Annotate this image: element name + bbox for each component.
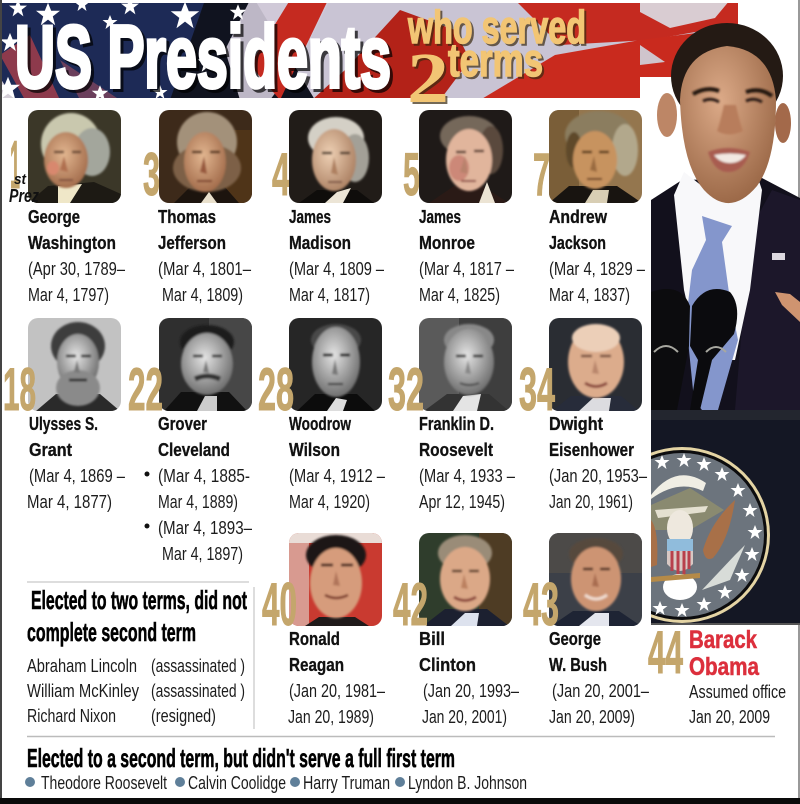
microphones [651,289,737,410]
subtitle: who served 2 terms [407,1,588,120]
number 44: 44 [648,619,683,686]
number 5: 5 [403,141,420,208]
title: US Presidents [18,10,394,109]
panel: James Monroe [403,110,514,305]
tie [686,216,738,410]
name and dates: (Mar 4, 1809 – [289,259,384,279]
name and dates: Mar 4, 1889) [158,492,238,512]
list with bullets: Theodore Roosevelt [41,773,167,793]
heading: complete second term [27,617,196,647]
name and dates: Apr 12, 1945) [419,492,505,512]
suit [651,178,800,410]
panel: Franklin D. Roosevelt [388,318,515,512]
name and dates: Thomas [158,207,216,227]
name and dates: (Jan 20, 2001– [552,681,649,701]
list: William McKinley [27,681,139,701]
name and dates: James [289,207,331,227]
panel: Andrew Jackson [533,110,645,305]
name and dates: Jan 20, 2001) [422,707,507,727]
lapel pin [772,253,785,260]
head [657,23,791,203]
portrait [28,110,121,203]
name: Obama [689,653,760,681]
number 40: 40 [262,571,297,638]
name and dates [288,629,385,727]
name and dates [419,629,519,727]
panel: Ronald Reagan [262,533,385,727]
panel: Ulysses S. Grant: 18 [3,356,36,423]
name and dates: George [549,629,601,649]
heading: Elected to two terms, did not [31,585,247,615]
list: Richard Nixon [27,706,116,726]
list with bullets: Calvin Coolidge [188,773,286,793]
name and dates: Jackson [549,233,606,253]
name and dates: (Mar 4, 1933 – [419,466,515,486]
name and dates: (Mar 4, 1885- [158,466,250,486]
name and dates: (Mar 4, 1817 – [419,259,514,279]
title [15,7,394,109]
name and dates: (Mar 4, 1801– [158,259,251,279]
name and dates: Mar 4, 1825) [419,285,500,305]
heading: Elected to a second term, but didn't serve a full first term [27,743,455,773]
name and dates: Eisenhower [549,440,634,460]
portrait [419,110,512,203]
name and dates: Jan 20, 1961) [549,492,633,512]
panel: Bill Clinton [393,533,519,727]
portrait [289,533,382,626]
name and dates: Mar 4, 1877) [27,492,112,512]
number 43: 43 [523,571,559,638]
list: (assassinated ) [151,681,245,701]
name and dates: (Jan 20, 1981– [289,681,385,701]
portrait [159,110,252,203]
name and dates: Madison [289,233,351,253]
name: Barack [689,626,757,654]
hand [775,292,800,322]
number 3: 3 [143,141,160,208]
name and dates: (Jan 20, 1953– [549,466,647,486]
right page border [798,0,800,804]
name and dates: Woodrow [289,414,352,434]
name and dates: W. Bush [549,655,607,675]
name and dates: Bill [419,629,445,649]
portrait [419,318,512,411]
list: Abraham Lincoln [27,656,137,676]
list with bullets [25,773,527,793]
portrait [549,110,642,203]
name and dates [27,414,125,512]
name and dates [28,207,125,305]
panel: Woodrow Wilson [258,318,385,512]
panel: elected to two terms [27,582,254,729]
list [27,656,245,726]
name and dates: Mar 4, 1797) [28,285,109,305]
name and dates: Monroe [419,233,475,253]
banner: american flag [2,3,738,98]
name and dates: George [28,207,80,227]
panel: James Madison [272,110,384,305]
name and dates [549,207,645,305]
name and dates: Mar 4, 1920) [289,492,370,512]
list: (resigned) [151,706,216,726]
name and dates [549,629,649,727]
number 7: 7 [533,141,550,208]
name and dates: Cleveland [158,440,230,460]
panel: George W. Bush [523,533,649,727]
name and dates [549,414,647,512]
title: US Presidents [15,7,391,106]
panel: Thomas Jefferson [143,110,252,305]
shirt [674,172,762,360]
name and dates: Jefferson [158,233,226,253]
number 1st prez: st [14,171,27,188]
name and dates [158,207,251,305]
name and dates: (Mar 4, 1869 – [29,466,125,486]
number 4: 4 [272,141,290,208]
office dates [689,682,786,727]
name and dates: Washington [28,233,116,253]
portrait [549,318,642,411]
seal [651,447,770,623]
portrait [159,318,252,411]
name and dates: Clinton [419,655,476,675]
subtitle: who served 2 terms: 2 [407,38,449,118]
number 34: 34 [519,356,555,423]
panel: George Washington [9,110,125,305]
name and dates [144,414,252,564]
bottom page border [0,798,800,804]
number 28: 28 [258,356,294,423]
name and dates: Jan 20, 1989) [288,707,374,727]
photo: podium with presidential seal [651,410,800,625]
name and dates: Mar 4, 1817) [289,285,370,305]
list with bullets: Lyndon B. Johnson [408,773,527,793]
portrait [419,533,512,626]
name and dates [419,414,515,512]
name and dates [289,414,385,512]
heading [27,585,247,647]
subtitle: who served 2 terms: terms [448,34,543,86]
subtitle: who served 2 terms: 2 [409,40,451,120]
name and dates: Mar 4, 1837) [549,285,630,305]
name and dates: (Mar 4, 1912 – [289,466,385,486]
list: (assassinated ) [151,656,245,676]
subtitle: who served 2 terms: who served [407,1,586,53]
name and dates: (Jan 20, 1993– [423,681,519,701]
portrait [289,318,382,411]
name and dates: Wilson [289,440,340,460]
list with bullets: Harry Truman [303,773,390,793]
name and dates [419,207,514,305]
subtitle: who served 2 terms: who served [409,3,588,55]
left page border [0,0,2,804]
photo: Barack Obama at podium [651,23,800,410]
number 32: 32 [388,356,424,423]
number 1st prez: Prez [9,186,39,206]
office dates: Jan 20, 2009 [689,707,770,727]
name and dates: Grover [158,414,207,434]
panel: Grover Cleveland [128,318,252,564]
name and dates: Mar 4, 1897) [162,544,243,564]
name and dates: (Mar 4, 1893– [158,518,252,538]
name and dates: Mar 4, 1809) [162,285,243,305]
number 22: 22 [128,356,163,423]
name and dates: Jan 20, 2009) [549,707,635,727]
panel: Barack Obama [648,619,786,727]
number 1st prez: 1 [10,127,20,203]
portrait [549,533,642,626]
name and dates: (Mar 4, 1829 – [549,259,645,279]
panel: Ulysses S. Grant [3,318,125,512]
name and dates: Reagan [289,655,344,675]
name and dates: Roosevelt [419,440,493,460]
name and dates: Dwight [549,414,603,434]
name and dates: Ulysses S. [29,414,98,434]
number 42: 42 [393,571,428,638]
name and dates: Franklin D. [419,414,494,434]
name and dates: (Apr 30, 1789– [28,259,125,279]
name [689,626,760,681]
panel: Dwight Eisenhower [519,318,647,512]
portrait [289,110,382,203]
panel: elected to a second term [25,736,775,793]
subtitle: who served 2 terms: terms [450,36,545,88]
name and dates: James [419,207,461,227]
name and dates: Grant [29,440,72,460]
name and dates [289,207,384,305]
name and dates: Andrew [549,207,608,227]
portrait [28,318,121,411]
name and dates: Ronald [289,629,340,649]
